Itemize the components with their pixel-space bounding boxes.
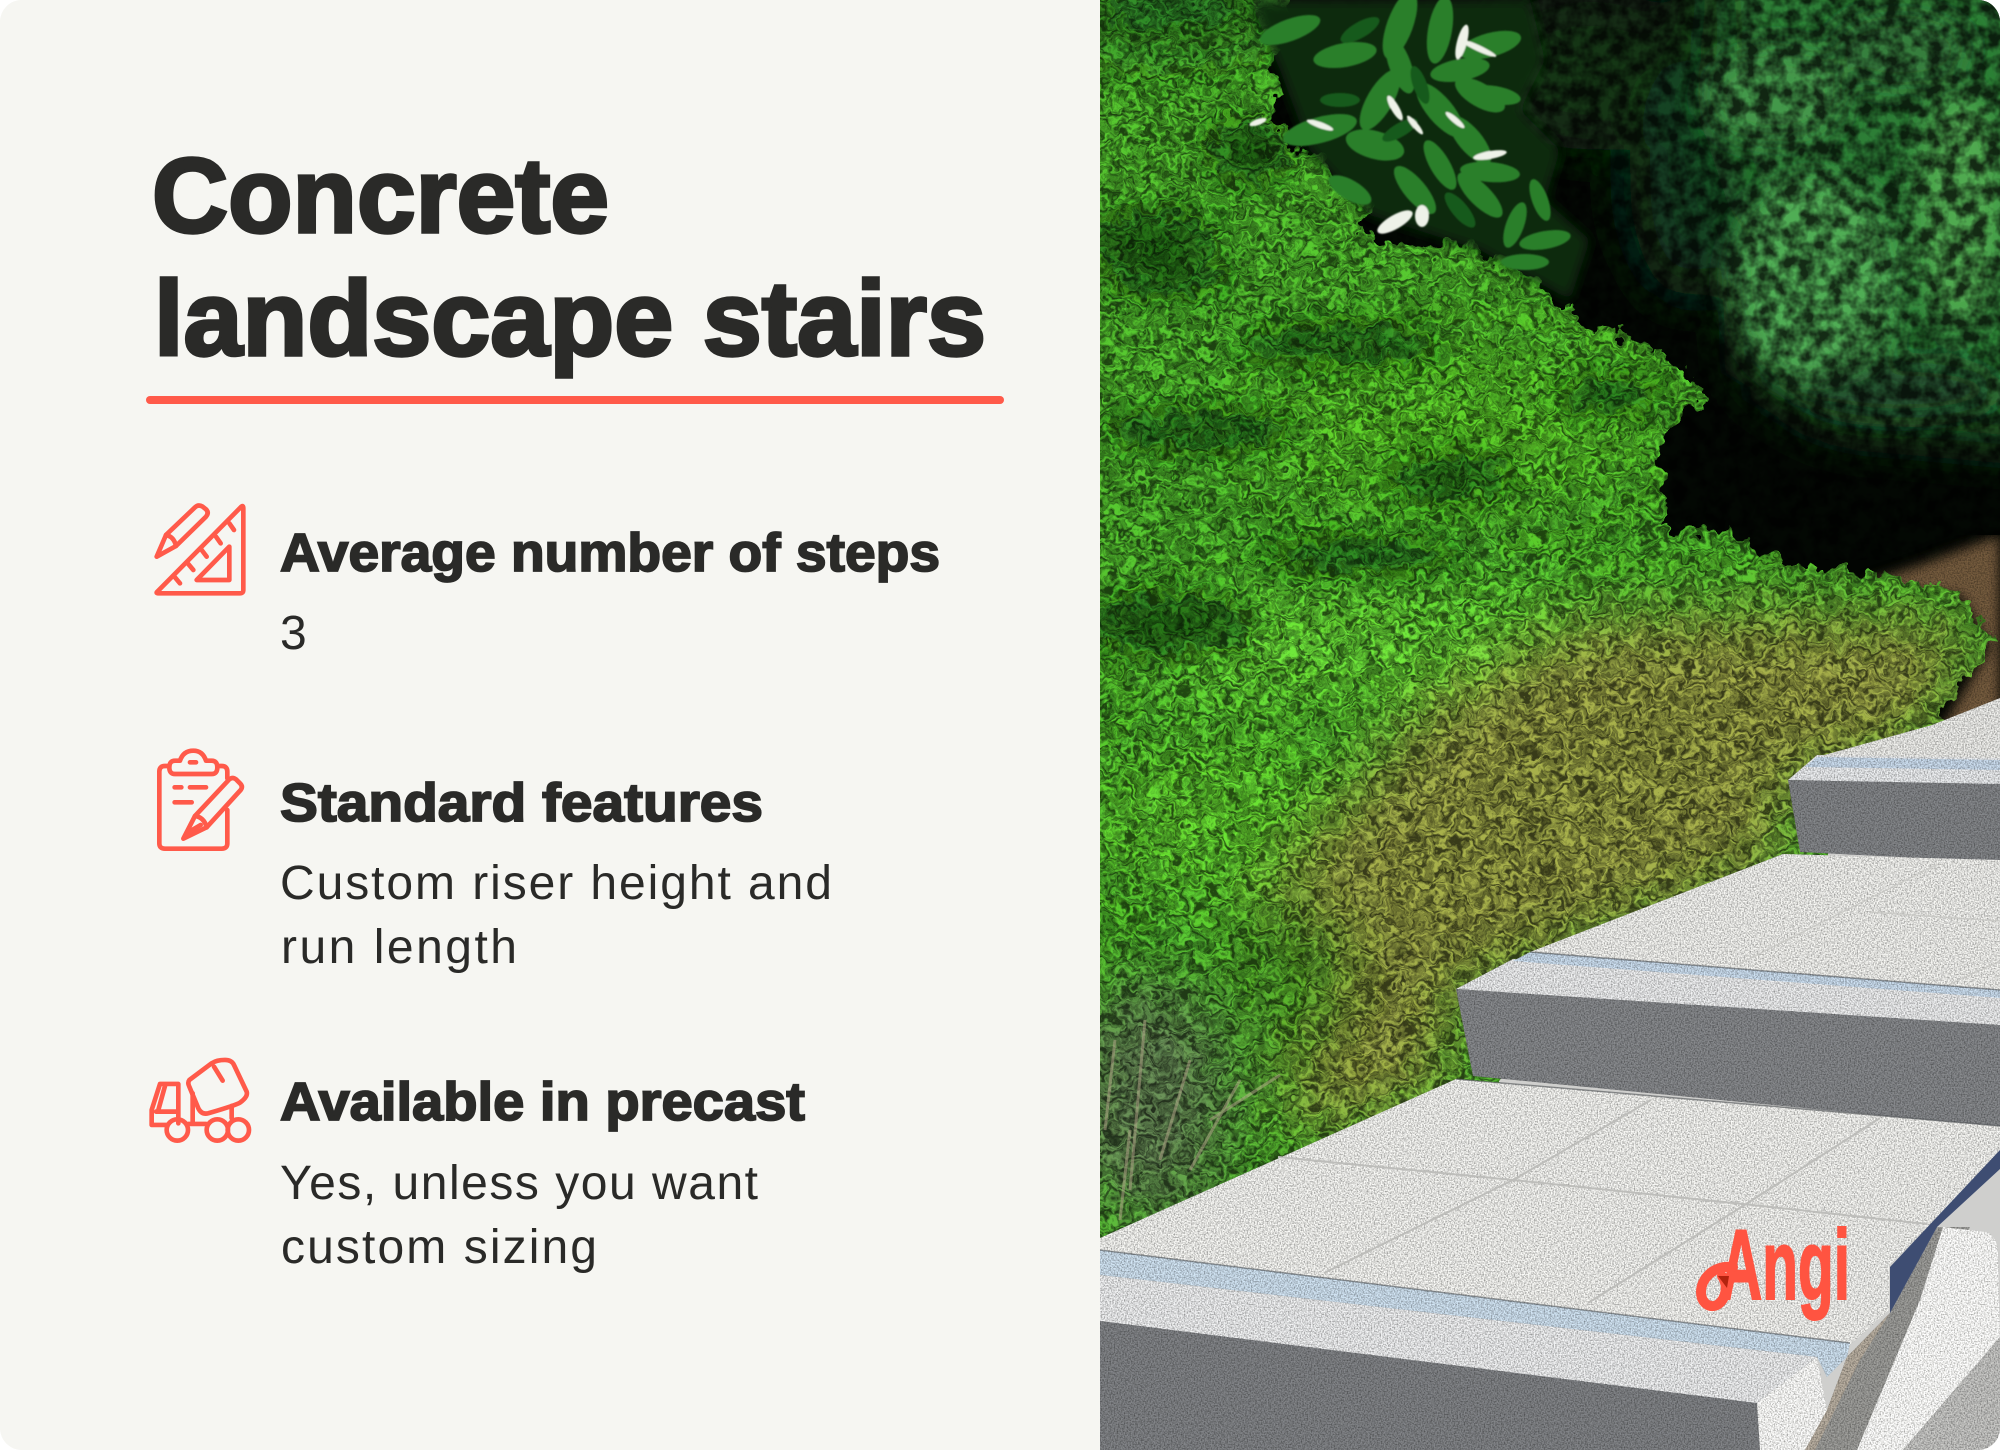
item: standard features: run length — [281, 921, 517, 974]
photo base — [1499, 854, 2000, 1450]
description: Custom riser height and — [280, 857, 832, 910]
curb — [1805, 1227, 2000, 1450]
heading: Average number of steps — [280, 523, 940, 583]
logo: Angi: Angi — [1720, 1209, 1850, 1320]
item: standard features — [159, 751, 832, 974]
lavender stalks — [1105, 1020, 1280, 1220]
icon: clipboard and pencil — [159, 751, 242, 849]
title — [152, 137, 986, 378]
stair lower steps — [1100, 698, 2000, 1450]
panel: text background — [0, 0, 1100, 1450]
title: Concrete — [152, 137, 609, 255]
joint lines and gap — [1100, 864, 2000, 1343]
juniper hedge — [1050, 0, 2000, 1280]
dark green shrub — [1518, 0, 2000, 476]
title: landscape stairs — [154, 260, 986, 378]
item: available in precast — [152, 1060, 805, 1274]
lower step — [1100, 1079, 2000, 1450]
mulch ground — [1876, 535, 2000, 720]
top step — [1788, 698, 2000, 862]
heading: Standard features — [280, 773, 763, 833]
icon: cement mixer truck — [152, 1060, 249, 1141]
value: 3 — [280, 607, 307, 660]
logo: Angi — [1696, 1226, 1846, 1321]
middle step — [1456, 854, 2000, 1127]
item: available in precast: custom sizing — [281, 1221, 597, 1274]
title underline — [146, 396, 1004, 404]
heading: Available in precast — [280, 1072, 805, 1132]
laurel leaves — [1249, 0, 1590, 300]
item: average number of steps — [157, 505, 940, 660]
panel: garden stairs photo — [1050, 0, 2000, 1450]
dark shade background — [1782, 0, 2000, 721]
description: Yes, unless you want — [280, 1157, 758, 1210]
icon: ruler triangle and pencil — [157, 505, 243, 593]
